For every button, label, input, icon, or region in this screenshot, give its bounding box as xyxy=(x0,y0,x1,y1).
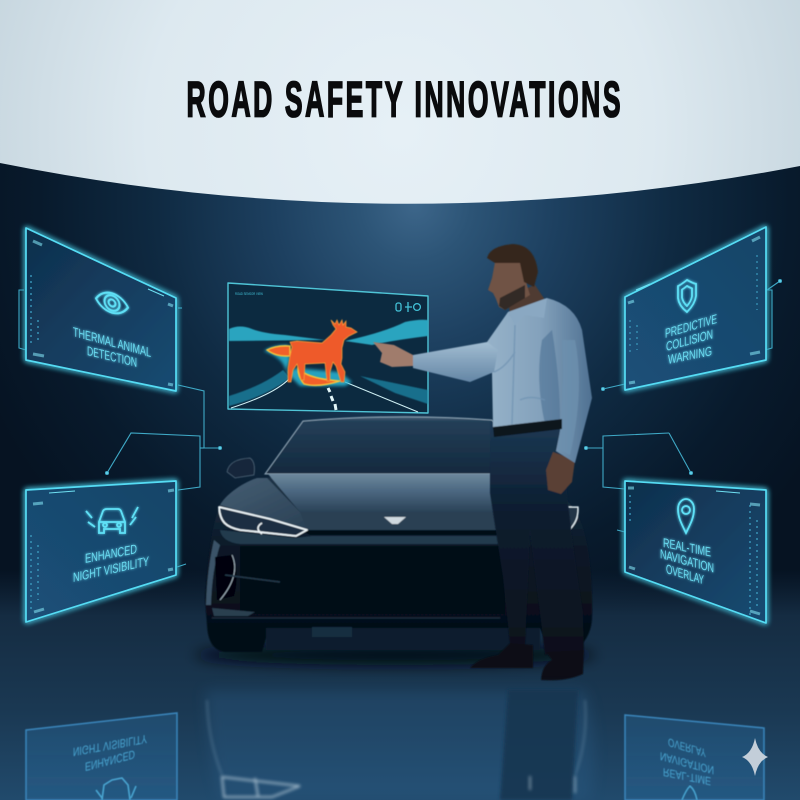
lower strip xyxy=(220,530,500,544)
reflected left panel xyxy=(26,713,177,800)
icon: map pin xyxy=(678,499,694,533)
thermal deer xyxy=(267,320,357,385)
icon: eye xyxy=(96,289,128,317)
text: thermal animal detection xyxy=(73,324,151,370)
panel: enhanced night visibility xyxy=(26,481,176,622)
floor xyxy=(0,570,800,800)
title: ROAD SAFETY INNOVATIONS xyxy=(186,73,621,128)
hand on side xyxy=(546,452,575,494)
text: enhanced night visibility: NIGHT VISIBILITY xyxy=(73,553,149,585)
hair xyxy=(487,244,538,287)
under-car gap xyxy=(266,628,540,650)
sparkle watermark xyxy=(742,738,768,776)
sky backdrop xyxy=(0,0,800,220)
gap strip xyxy=(300,530,500,535)
lit side edge xyxy=(206,540,220,605)
face xyxy=(488,262,530,310)
text: enhanced night visibility xyxy=(73,541,149,585)
collar xyxy=(508,298,547,325)
headlight left xyxy=(219,507,307,536)
text: predictive collision warning: COLLISION xyxy=(666,327,713,354)
nose panel xyxy=(300,512,500,530)
reflected right panel: OVERLAY xyxy=(668,735,706,759)
fender xyxy=(220,478,330,530)
text: enhanced night visibility: ENHANCED xyxy=(85,541,137,566)
shirt torso xyxy=(487,298,592,463)
grille xyxy=(240,546,505,614)
shirt folds xyxy=(539,330,560,424)
panel: real-time navigation overlay xyxy=(625,481,766,623)
text: thermal animal detection: THERMAL ANIMAL xyxy=(73,324,151,360)
panel: thermal animal detection xyxy=(26,228,176,391)
body shell xyxy=(205,472,592,652)
reflected right panel: REAL-TIME xyxy=(663,765,711,788)
curved dark wall xyxy=(0,163,800,800)
car xyxy=(195,417,595,665)
center thermal screen xyxy=(228,283,428,413)
text: real-time navigation overlay xyxy=(660,535,714,587)
mirror xyxy=(227,458,254,478)
belt xyxy=(493,419,562,437)
windshield xyxy=(265,417,530,474)
pointing arm xyxy=(413,342,498,382)
icon: shield xyxy=(678,279,696,313)
panel: predictive collision warning xyxy=(625,227,766,390)
hood xyxy=(268,474,550,512)
trousers xyxy=(490,418,584,655)
reflected left panel: ENHANCED xyxy=(85,747,135,774)
icon: car with beams xyxy=(86,507,138,533)
reflected car icon xyxy=(96,778,136,800)
text: real-time navigation overlay: OVERLAY xyxy=(666,561,704,587)
center line dashes xyxy=(328,388,336,410)
reflected right panel: NAVIGATION xyxy=(660,749,714,776)
text: predictive collision warning: PREDICTIVE xyxy=(665,311,717,341)
neck xyxy=(508,285,545,316)
reflected car and man xyxy=(205,690,594,800)
car badge xyxy=(384,517,406,524)
road edges xyxy=(231,378,418,412)
screen caption: ROAD SENSOR VIEW xyxy=(235,291,263,296)
heat halo xyxy=(264,345,352,386)
man xyxy=(373,244,592,680)
reflected left panel: NIGHT VISIBILITY xyxy=(73,732,147,759)
connector lines xyxy=(19,280,782,567)
hills xyxy=(229,320,428,345)
headlight right xyxy=(566,507,578,529)
text: real-time navigation overlay: REAL-TIME xyxy=(663,535,711,560)
car shadow xyxy=(195,645,595,665)
beard xyxy=(499,285,525,310)
reflected right panel xyxy=(625,715,764,800)
left intake xyxy=(215,555,237,600)
text: predictive collision warning: WARNING xyxy=(668,343,712,367)
terrain glow xyxy=(229,370,428,406)
text: thermal animal detection: DETECTION xyxy=(87,343,137,370)
reflected pin icon xyxy=(682,786,697,800)
icon row xyxy=(396,302,420,312)
floor reflection xyxy=(26,690,764,800)
text: predictive collision warning xyxy=(665,311,717,367)
text: real-time navigation overlay: NAVIGATION xyxy=(660,546,714,576)
shoes xyxy=(470,643,584,680)
pointing hand xyxy=(373,342,413,367)
